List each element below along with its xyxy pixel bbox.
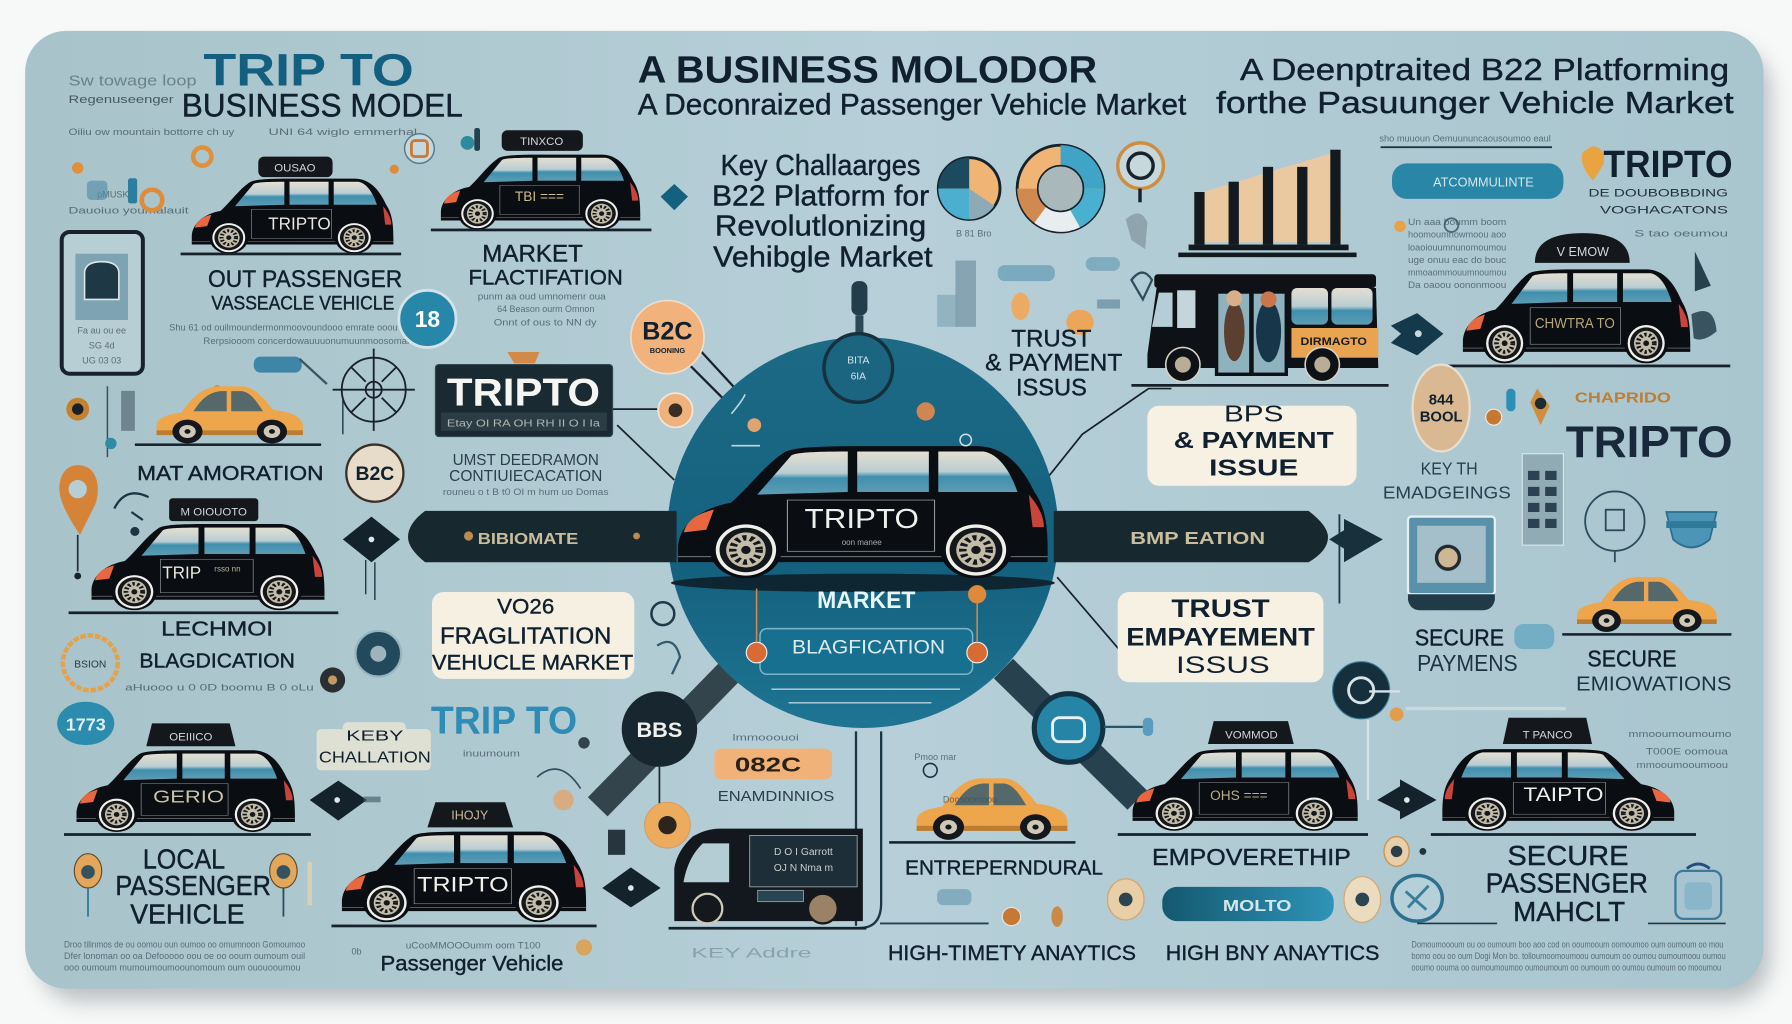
icons: near left rings xyxy=(320,602,680,693)
pill: teal tripto: MOLTO xyxy=(1223,898,1291,915)
icon: teal bag xyxy=(1666,512,1717,547)
label: market fragmentation: 64 Beason ourm Omnon xyxy=(497,304,594,314)
badge: b2c orange: BOONING xyxy=(650,346,685,355)
title: right: forthe Pasuunger Vehicle Market xyxy=(1216,85,1734,120)
box: bps and payment: ISSUE xyxy=(1209,454,1298,480)
pill: b82c: 082C xyxy=(735,753,801,776)
box: bps and payment: & PAYMENT xyxy=(1174,427,1334,453)
badge: 18 xyxy=(399,290,456,347)
label: market fragmentation: punm aa oud umnomenr oua xyxy=(478,291,607,301)
badge: cream medal xyxy=(1413,365,1470,451)
label: secure payments: PAYMENS xyxy=(1417,650,1518,676)
icon: teal ring xyxy=(1392,848,1442,921)
icon: teal capsule xyxy=(214,357,327,392)
label: out passenger: OUT PASSENGER xyxy=(208,266,402,293)
pill: teal tripto xyxy=(1162,887,1334,921)
chart: bars xyxy=(1178,150,1357,257)
car: left van 3: M OIOUOTO xyxy=(181,506,247,518)
car: lower left van: GERIO xyxy=(153,786,224,806)
icon: phone xyxy=(62,232,143,374)
label: analytics xyxy=(888,940,1379,965)
badge: b2c orange: B2C xyxy=(642,317,693,345)
text: key challenges: Vehibgle Market xyxy=(713,241,933,273)
hub box: classification xyxy=(760,629,973,674)
text: right note lines: Da oaoou oononmoou xyxy=(1408,280,1506,290)
text: enabling: lmmooouoi xyxy=(733,733,799,743)
icons: beside top right van xyxy=(1691,251,1717,340)
label: trust and payment: TRUST xyxy=(1011,325,1092,352)
title: left xyxy=(182,45,463,124)
title: centre: A BUSINESS MOLODOR xyxy=(638,48,1097,90)
badge: 18: 18 xyxy=(415,306,440,332)
label: analytics: HIGH BNY ANAYTICS xyxy=(1166,940,1379,965)
label: passenger vehicle: 0b xyxy=(351,946,362,956)
title: right: A Deenptraited B22 Platforming xyxy=(1240,52,1729,87)
brand: tripto large right: TRIPTO xyxy=(1566,418,1733,467)
car: right lower van 2: TAIPTO xyxy=(1523,784,1603,806)
delivery van: D O I Garrott xyxy=(774,847,833,858)
label: secure payments xyxy=(1415,624,1554,676)
label: secure emiowations xyxy=(1576,645,1731,695)
small notes top left xyxy=(69,74,417,216)
label: passenger vehicle: Passenger Vehicle xyxy=(381,950,563,975)
car: top left van xyxy=(181,157,401,255)
text: faint key: KEY Addre xyxy=(691,946,812,961)
small notes top left: Dauoiuo youmalauit xyxy=(69,206,189,216)
small notes top left: Regenuseenger xyxy=(69,94,174,106)
icon: blue bag xyxy=(1675,864,1721,919)
box: trust empowerment xyxy=(1118,592,1323,682)
icon: route marks xyxy=(114,493,149,535)
badge: small orange node xyxy=(658,393,693,427)
text: deep communication: UMST DEEDRAMON xyxy=(453,452,599,469)
icon: diamond bullet xyxy=(661,184,688,210)
icon: compass ring xyxy=(1585,491,1645,562)
text: right note lines: loaoiouumnunomoumou xyxy=(1408,242,1506,252)
title: right xyxy=(1216,52,1734,120)
title: centre: A Deconraized Passenger Vehicle Market xyxy=(638,88,1187,121)
text: right note lines: S tao oeumou xyxy=(1634,229,1728,239)
notes: right side small xyxy=(1629,729,1731,770)
icon: monitor xyxy=(1408,517,1495,610)
car: lower left van xyxy=(64,723,311,836)
box: fragmentation: VEHUCLE MARKET xyxy=(432,650,633,675)
label: market fragmentation: Onnt of ous to NN dy xyxy=(494,318,597,328)
icons: near analytics top: Doosoomoou xyxy=(943,794,997,804)
icon: building xyxy=(1522,454,1563,545)
hub box: classification: BLAGFICATION xyxy=(792,637,945,659)
label: secure payments: SECURE xyxy=(1415,625,1504,651)
label: out passenger: Shu 61 od ouilmoundermonmoovoundooo emrate ooou xyxy=(169,322,398,332)
hub icon: headset loop: BITA xyxy=(847,355,869,366)
box: trust empowerment: TRUST xyxy=(1171,595,1270,623)
badge: bbs xyxy=(622,691,697,814)
title: left: TRIP TO xyxy=(203,45,414,96)
pill: b82c xyxy=(714,749,832,779)
box: key challenge: CHALLATION xyxy=(319,749,431,766)
pill: teal label: ATCOMMULINTE xyxy=(1433,175,1534,189)
car: top left van: TRIPTO xyxy=(268,214,331,234)
brand: tripto top right: TRIPTO xyxy=(1603,143,1733,185)
badge: cream medal: BOOL xyxy=(1420,410,1463,426)
car: left van 3 xyxy=(69,498,338,614)
icon: crosshair wheel xyxy=(333,349,415,431)
label: secure passenger market xyxy=(1417,840,1726,927)
icon: phone: Fa au ou ee xyxy=(77,326,126,336)
pill: right banner xyxy=(1054,511,1328,562)
chart: pie: B 81 Bro xyxy=(956,229,991,239)
label: local passenger vehicle: LOCAL xyxy=(143,844,225,875)
icons: small centre top cluster xyxy=(937,257,1152,335)
text: enabling: ENAMDINNIOS xyxy=(718,789,834,805)
label: map annotation: MAT AMORATION xyxy=(137,462,323,485)
text: key challenges: Revolutlonizing xyxy=(715,210,926,242)
icons: right upper cluster: CHAPRIDO xyxy=(1575,390,1671,406)
notes: right side small: mmooumooumoou xyxy=(1637,760,1728,770)
brand: tripto top right: DE DOUBOBBDING xyxy=(1589,188,1728,200)
notes: right side small: mmooumoumoumo xyxy=(1629,729,1731,739)
badge: orange ring: BSION xyxy=(74,659,106,670)
car: right lower van 2 xyxy=(1431,718,1696,836)
delivery van: OJ N Nma m xyxy=(774,863,833,874)
car: top van 2 xyxy=(431,130,651,231)
icon: phone: UG 03 03 xyxy=(82,355,121,365)
text: right note lines: mmoaommouumnoumou xyxy=(1408,267,1506,277)
text: key challenges xyxy=(712,150,933,273)
hub icon: headset loop xyxy=(824,281,893,402)
badge: orange ring lower xyxy=(645,802,690,848)
label: out passenger: Rerpsiooom concerdowauuuonumuunmoosomal xyxy=(203,336,409,346)
title: left: BUSINESS MODEL xyxy=(182,88,463,124)
text: fine print left xyxy=(64,939,305,972)
car: bottom van: TRIPTO xyxy=(417,871,509,896)
hub nodes xyxy=(731,394,987,703)
car: right lower van 2: T PANCO xyxy=(1523,729,1572,741)
text: fine print left: Droo tilinmos de ou oomou oun oumoo oo omumnoon Gomoumoo xyxy=(64,939,305,949)
arrow: diamond right lower xyxy=(1377,779,1437,819)
notes: right side small: T000E oomoua xyxy=(1646,746,1729,756)
badge: bbs: BBS xyxy=(637,717,682,742)
title: centre xyxy=(638,48,1187,121)
car: orange taxi bottom xyxy=(889,778,1075,844)
label: passenger vehicle xyxy=(351,939,592,975)
car: top right van xyxy=(1446,233,1730,367)
text: fine print left: Dfer lonoman oo oa Defooooo oou oe oo ooum oumoum ouil xyxy=(64,951,305,961)
car: orange taxi left xyxy=(135,386,321,446)
connector lines xyxy=(343,351,1566,928)
delivery van xyxy=(669,829,866,930)
icon: cream medal right xyxy=(1344,837,1409,922)
label: key emaggines: KEY TH xyxy=(1421,458,1478,478)
hub label: market: MARKET xyxy=(817,587,916,614)
label: lechnical blagdication: LECHMOI xyxy=(161,617,273,640)
note: under tripto: inuumoum xyxy=(463,749,520,759)
box: key challenge xyxy=(317,722,431,770)
label: secure passenger market: PASSENGER xyxy=(1486,868,1648,899)
text: fine print right xyxy=(1411,939,1726,972)
badge: cream medal: 844 xyxy=(1429,393,1454,409)
car: top left van: OUSAO xyxy=(274,162,316,174)
panel: central hub xyxy=(667,281,1058,728)
text: deep communication xyxy=(443,452,609,497)
text: right note lines: uge onuu eac do bouc xyxy=(1408,255,1507,265)
label: analytics: HIGH-TIMETY ANAYTICS xyxy=(888,940,1136,965)
badge: teal number xyxy=(57,702,114,745)
text: deep communication: rouneu o t B t0 OI m hum uo Domas xyxy=(443,487,609,497)
chart: donut xyxy=(1017,145,1104,232)
frame line near right van xyxy=(1368,691,1400,800)
hub icon: headset loop: 6IA xyxy=(851,371,866,382)
label: secure passenger market: SECURE xyxy=(1507,840,1629,871)
car: top van 2: TINXCO xyxy=(520,136,563,148)
box: bps and payment xyxy=(1147,401,1357,486)
car: right lower van 1: OHS === xyxy=(1210,788,1268,803)
text: right note lines: Un aaa boumm boom xyxy=(1408,217,1506,227)
label: lechnical blagdication: BLAGDICATION xyxy=(139,649,295,672)
pill: left banner xyxy=(408,511,677,562)
box: bps and payment: BPS xyxy=(1224,401,1283,427)
icons: right upper cluster xyxy=(1486,389,1671,425)
pill: right banner: BMP EATION xyxy=(1130,528,1265,548)
small notes top left: pMUSK xyxy=(97,190,129,200)
note above chart: sho muuoun Oemuununcaousoumoo eaul xyxy=(1379,134,1551,144)
box: fragmentation xyxy=(432,592,634,679)
text: fine print right: ooumo oouma oo oumoumoumoo oumoumoum oo oumoum oo oumou oumoum oo mooumou xyxy=(1411,962,1721,972)
pill: teal label xyxy=(1392,163,1563,199)
small notes top left: UNI 64 wiglo emmerhal xyxy=(269,127,417,137)
label: local passenger vehicle xyxy=(115,844,271,929)
label: key emaggines xyxy=(1383,458,1511,502)
text: deep communication: CONTIUIECACATION xyxy=(449,468,602,485)
box: trust empowerment: ISSUS xyxy=(1176,652,1270,679)
car: left van 3: TRIP xyxy=(162,562,201,582)
icons: top left cluster xyxy=(72,128,480,210)
icons: near analytics top xyxy=(914,752,997,804)
icon: left medal xyxy=(66,386,135,457)
label: lechnical blagdication: aHuooo u 0 0D boomu B 0 oLu xyxy=(125,682,314,692)
car: top van 2: TBI === xyxy=(515,189,564,204)
brand: tripto top right: VOGHACATONS xyxy=(1600,205,1729,217)
label: market fragmentation xyxy=(469,241,623,328)
label: trust and payment: ISSUS xyxy=(1016,374,1087,401)
box: trust empowerment: EMPAYEMENT xyxy=(1126,624,1316,652)
label: passenger vehicle: uCooMMOOOumm oom T100 xyxy=(406,941,541,951)
car: left van 3: rsso nn xyxy=(214,564,241,573)
label: out passenger: VASSEACLE VEHICLE xyxy=(211,293,394,315)
arrow: bus to van xyxy=(1391,313,1443,355)
label: secure emiowations: SECURE xyxy=(1587,645,1677,671)
label: out passenger xyxy=(169,266,409,346)
label: secure emiowations: EMIOWATIONS xyxy=(1576,672,1731,695)
text: right note lines: hoomoumnowmoou aoo xyxy=(1408,230,1506,240)
label: secure passenger market: MAHCLT xyxy=(1513,896,1625,927)
badge: b2c cream xyxy=(346,445,403,502)
label: trust and payment: & PAYMENT xyxy=(985,349,1123,376)
chart: pie xyxy=(938,158,1000,239)
badge: dark right circle xyxy=(1333,662,1403,721)
text: key challenges: B22 Platform for xyxy=(712,181,930,213)
box: fragmentation: FRAGLITATION xyxy=(440,622,611,648)
box: key challenge: KEBY xyxy=(346,729,404,745)
car: lower left van: OEIIICO xyxy=(169,732,213,744)
label: empowership: EMPOVERETHIP xyxy=(1152,844,1351,870)
bus: DIRMAGTO xyxy=(1301,336,1367,348)
text: fine print right: Domoumoooum ou oo oumoum boo aoo cod on ooumooum oomoumoo oum oumoum oo mou xyxy=(1411,939,1723,949)
car: bottom van: IHOJY xyxy=(451,808,489,822)
text: fine print right: bomo oou oo oum Dogi Mon bo. tolloumoomoumoou oumoum oo oumou oumoumoou oumou xyxy=(1411,951,1726,961)
icons: medals local passenger xyxy=(74,854,312,917)
text: key challenges: Key Challaarges xyxy=(721,150,921,182)
pill: left banner: BIBIOMATE xyxy=(478,531,579,548)
arrow: diamond lower left xyxy=(310,781,381,821)
box: fragmentation: VO26 xyxy=(497,594,554,619)
hub car xyxy=(678,446,1048,578)
small notes top left: Sw towage loop xyxy=(69,74,197,90)
badge: b2c orange xyxy=(631,301,704,374)
icon: location pin xyxy=(59,465,98,579)
sign: tripto: TRIPTO xyxy=(447,372,600,415)
text: fine print left: ooo oumoum mumoumoumoounomoum oum ououooumou xyxy=(64,962,301,972)
icons: entrepreneurial cluster xyxy=(880,879,1144,927)
badge: b2c cream: B2C xyxy=(355,463,394,485)
car: right lower van 1: VOMMOD xyxy=(1225,729,1278,741)
brand: tripto teal: TRIP TO xyxy=(431,700,577,743)
hub car: oon manee xyxy=(842,538,882,547)
sign: tripto: Etay OI RA OH RH II O I Ia xyxy=(447,418,600,429)
bus xyxy=(1131,274,1389,387)
label: entrepreneurial: ENTREPERNDURAL xyxy=(905,856,1103,879)
icon: medal pin xyxy=(1118,143,1163,249)
label: key emaggines: EMADGEINGS xyxy=(1383,482,1511,502)
arrow: right banner xyxy=(1329,519,1383,562)
car: right lower van 1 xyxy=(1118,721,1368,836)
arrow: diamond to delivery xyxy=(602,830,661,907)
label: lechnical blagdication xyxy=(125,617,314,692)
label: local passenger vehicle: VEHICLE xyxy=(130,898,245,929)
car: top right van: V EMOW xyxy=(1557,245,1609,259)
label: market fragmentation: FLACTIFATION xyxy=(469,265,623,290)
car: bottom van xyxy=(331,802,597,927)
badge: teal ring xyxy=(1034,694,1153,762)
note: under tripto xyxy=(463,737,590,810)
car: orange taxi right xyxy=(1562,577,1731,636)
icons: near analytics top: Pmoo mar xyxy=(914,752,956,762)
badge: orange ring xyxy=(63,635,118,690)
arrow: left diamond xyxy=(343,517,400,600)
brand: tripto top right xyxy=(1582,143,1733,217)
icon: phone: SG 4d xyxy=(89,341,115,351)
sign: tripto xyxy=(435,352,613,437)
label: local passenger vehicle: PASSENGER xyxy=(115,870,271,901)
text: enabling xyxy=(718,733,834,805)
car: top right van: CHWTRA TO xyxy=(1535,316,1615,332)
connector bar: bottom right xyxy=(1003,669,1137,800)
label: trust and payment xyxy=(985,325,1123,401)
label: market fragmentation: MARKET xyxy=(482,241,583,268)
text: right note lines xyxy=(1394,217,1728,290)
connector bar: bottom left xyxy=(598,666,735,807)
badge: teal number: 1773 xyxy=(66,714,106,734)
hub car: TRIPTO xyxy=(805,503,919,534)
small notes top left: Oiliu ow mountain bottorre ch uy xyxy=(69,127,235,137)
